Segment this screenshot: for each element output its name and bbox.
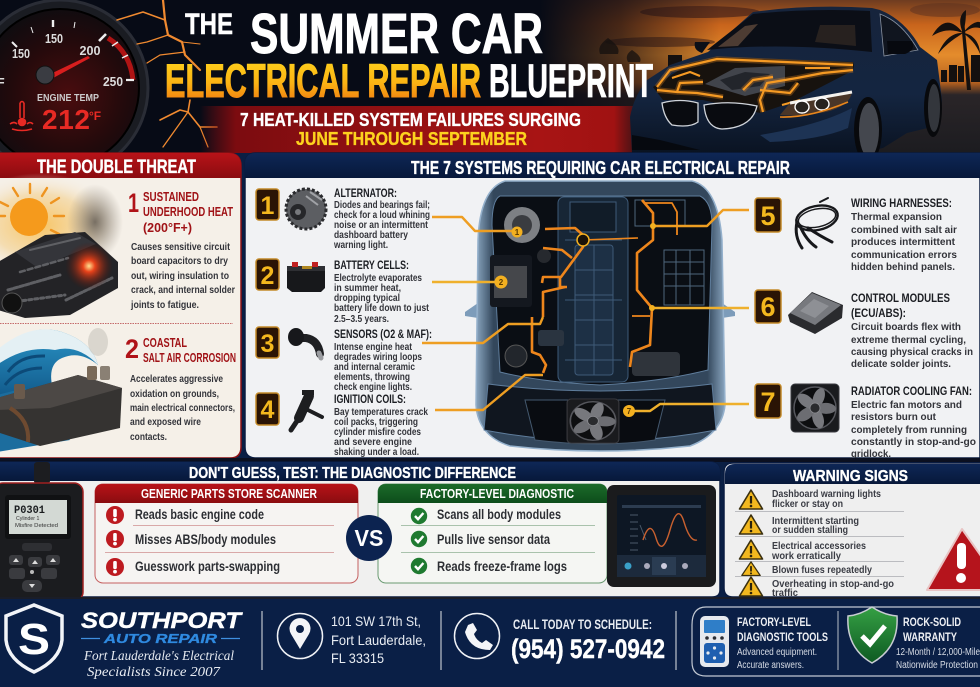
text: sensors: Intense engine heat: [334, 341, 412, 353]
icon: warranty shield: [848, 607, 897, 663]
title: SUMMER CAR: [250, 2, 543, 66]
header banner: [0, 0, 980, 176]
threat 1 text: Causes sensitive circuit: [131, 241, 230, 253]
text: battery cells: battery life down to just: [334, 302, 429, 314]
warning list text: Dashboard warning lights: [772, 488, 881, 500]
threat 1 text: crack, and internal solder: [131, 284, 235, 296]
card: factory-level diagnostic: FACTORY-LEVEL DIAGNOSTIC: [420, 486, 574, 501]
headlight: [780, 92, 852, 116]
heading: diagnostic difference: DON'T GUESS, TEST: THE DIAGNOSTIC DIFFERENCE: [189, 465, 516, 482]
text: battery cells: dropping typical: [334, 292, 400, 304]
panel: the double threat: [0, 153, 241, 458]
threat 2 text: COASTAL: [143, 335, 187, 350]
car x-ray diagram: [422, 181, 749, 451]
central engine block: [558, 197, 628, 382]
text: alternator: ALTERNATOR:: [334, 188, 397, 200]
brand name and tagline: Specialists Since 2007: [87, 664, 221, 679]
heading: warning signs: [725, 464, 980, 485]
text: ignition coils: [334, 394, 428, 458]
text: radiator cooling fan: completely from running: [851, 424, 967, 436]
leader lines: [422, 210, 749, 411]
card: factory-level diagnostic: Scans all body modules: [437, 507, 561, 522]
car x-ray diagram: 7: [627, 407, 632, 416]
text: radiator cooling fan: resistors burn out: [851, 411, 936, 423]
icon: wiring harness: [794, 198, 840, 248]
text: warranty: ROCK-SOLID: [903, 615, 961, 629]
text: warranty: WARRANTY: [903, 630, 957, 644]
text: wiring harnesses: produces intermittent: [851, 236, 955, 248]
card: generic parts store scanner: Misses ABS/body modules: [135, 532, 276, 547]
handheld OBD scanner: P0301: [14, 505, 45, 517]
warning list text: Blown fuses repeatedly: [772, 564, 872, 576]
hood wiring: [657, 59, 853, 112]
threat 1 text: out, wiring insulation to: [131, 270, 229, 282]
heading: the 7 systems: THE 7 SYSTEMS REQUIRING CAR ELECTRICAL REPAIR: [411, 158, 790, 178]
text: ignition coils: cylinder misfire codes: [334, 426, 421, 438]
text: wiring harnesses: [851, 198, 957, 273]
text: sensors: and internal ceramic: [334, 361, 415, 373]
sunset sky: [540, 0, 980, 153]
panel: the 7 systems: [245, 153, 980, 460]
text: ignition coils: IGNITION COILS:: [334, 394, 406, 406]
threat 1 text: [128, 188, 235, 311]
text: wiring harnesses: hidden behind panels.: [851, 261, 955, 273]
engine temperature gauge: 250: [103, 75, 123, 89]
threat 1 text: UNDERHOOD HEAT: [143, 204, 233, 219]
text: diagnostic tools: Advanced equipment.: [737, 647, 817, 658]
title: BLUEPRINT: [489, 54, 653, 107]
card: generic parts store scanner: Guesswork parts-swapping: [135, 559, 280, 574]
wheels: [854, 97, 882, 163]
box: tools and warranty: [692, 607, 980, 676]
engine temperature gauge: °F: [89, 109, 101, 123]
text: radiator cooling fan: [851, 386, 976, 460]
car x-ray diagram: 1: [515, 228, 520, 237]
battery block: [490, 255, 532, 307]
icon: location pin: [278, 614, 322, 658]
text: alternator: dashboard battery: [334, 229, 408, 241]
number badge 6: 6: [760, 292, 776, 322]
logo shield: S: [18, 615, 50, 664]
call to action: CALL TODAY TO SCHEDULE:: [513, 617, 652, 632]
number badge 4: [256, 393, 279, 425]
heading: the 7 systems: [245, 153, 980, 178]
text: alternator: check for a loud whining: [334, 209, 430, 221]
title: THE: [185, 8, 233, 41]
number badge 5: [755, 198, 781, 232]
card: factory-level diagnostic: Pulls live sensor data: [437, 532, 550, 547]
subtitle banner: [200, 106, 650, 153]
heading: the double threat: THE DOUBLE THREAT: [37, 157, 196, 178]
text: radiator cooling fan: constantly in stop-and-go: [851, 436, 976, 448]
threat 2 text: and exposed wire: [130, 416, 201, 428]
logo shield: [6, 605, 62, 672]
warning list text: Overheating in stop-and-go: [772, 578, 894, 590]
text: radiator cooling fan: Electric fan motors and: [851, 399, 962, 411]
threat 2 text: Accelerates aggressive: [130, 373, 223, 385]
warning list text: work erratically: [771, 550, 841, 562]
text: wiring harnesses: combined with salt air: [851, 224, 957, 236]
icon: diagnostic device: [700, 616, 729, 667]
brand name and tagline: [81, 608, 243, 679]
text: sensors: SENSORS (O2 & MAF):: [334, 329, 432, 341]
text: diagnostic tools: FACTORY-LEVEL: [737, 615, 811, 629]
number badge 1: [256, 189, 279, 220]
text: control modules: extreme thermal cycling,: [851, 334, 966, 346]
card: factory-level diagnostic: [378, 484, 607, 583]
text: diagnostic tools: DIAGNOSTIC TOOLS: [737, 630, 828, 644]
text: alternator: [333, 188, 430, 251]
text: sensors: [334, 329, 432, 393]
engine temperature gauge: 212: [42, 104, 90, 135]
palm trees and skyline: [599, 10, 980, 90]
card: generic parts store scanner: Reads basic engine code: [135, 507, 264, 522]
address: FL 33315: [331, 650, 384, 666]
brand name and tagline: Fort Lauderdale's Electrical: [83, 648, 234, 663]
hood wiring glow: [657, 59, 853, 112]
handheld OBD scanner: Cylinder 1: [16, 516, 39, 522]
warning list text: Intermittent starting: [772, 515, 859, 527]
wiring: [532, 200, 677, 373]
car with glowing engine wiring: [630, 7, 942, 163]
compressor and pump: [632, 352, 680, 376]
text: battery cells: Electrolyte evaporates: [334, 272, 422, 284]
text: sensors: elements, throwing: [334, 371, 410, 383]
text: diagnostic tools: [737, 615, 828, 671]
dark gutter under panels: [0, 458, 980, 462]
text: wiring harnesses: WIRING HARNESSES:: [851, 198, 952, 210]
car x-ray diagram: 2: [499, 278, 504, 287]
warning list icons: [740, 490, 762, 596]
handheld OBD scanner: Misfire Detected: [15, 523, 58, 529]
text: ignition coils: coil packs, triggering: [334, 416, 418, 428]
text: radiator cooling fan: gridlock.: [851, 448, 891, 460]
engine temperature gauge: [0, 0, 148, 176]
number badge 7: 7: [760, 387, 776, 417]
text: battery cells: 2.5–3.5 years.: [334, 313, 389, 325]
illustration: wave and corroded battery: [0, 328, 122, 452]
text: warranty: [896, 615, 980, 671]
engine temperature gauge: 150: [45, 32, 63, 46]
right side module: [635, 200, 704, 305]
grille: [662, 100, 757, 129]
text: control modules: delicate solder joints.: [851, 358, 951, 370]
text: control modules: Circuit boards flex with: [851, 321, 961, 333]
icon: radiator fan: [791, 384, 839, 432]
panel: diagnostic difference: [0, 462, 720, 601]
icon: control module: [788, 292, 843, 334]
text: control modules: (ECU/ABS):: [851, 308, 906, 320]
icon: sensor: [288, 328, 321, 358]
threat 2 text: oxidation on grounds,: [130, 388, 219, 400]
text: alternator: noise or an intermittent: [334, 219, 428, 231]
number badge 3: 3: [261, 330, 274, 358]
alternator node: [504, 207, 540, 243]
threat 1 text: (200°F+): [143, 220, 192, 235]
handheld OBD scanner: [0, 462, 83, 601]
number badge 6: [755, 290, 781, 323]
lightning bolts: [117, 0, 217, 147]
text: sensors: check engine lights.: [334, 381, 412, 393]
text: wiring harnesses: communication errors: [851, 249, 957, 261]
address: [331, 613, 426, 666]
text: alternator: warning light.: [333, 239, 388, 251]
text: battery cells: in summer heat,: [334, 282, 401, 294]
number badge 4: 4: [261, 396, 275, 424]
threat 1 text: board capacitors to dry: [131, 255, 228, 267]
call to action: (954) 527-0942: [511, 634, 665, 664]
heading: warning signs: WARNING SIGNS: [793, 468, 908, 485]
threat 2 text: SALT AIR CORROSION: [143, 350, 236, 365]
large red warning triangle: [927, 529, 980, 590]
text: battery cells: [334, 260, 429, 325]
panel: warning signs: [724, 463, 980, 599]
threat 2 text: contacts.: [130, 431, 167, 443]
card: generic parts store scanner: [95, 484, 358, 583]
icon: ignition coil: [291, 390, 322, 430]
brand name and tagline: AUTO REPAIR: [103, 632, 217, 646]
engine temperature gauge: ENGINE TEMP: [37, 92, 99, 104]
warning list text: [771, 488, 894, 599]
threat 1 text: 1: [128, 188, 139, 218]
radiator fan: [567, 399, 619, 443]
engine temperature gauge: 150: [12, 47, 30, 61]
number badge 3: [256, 327, 279, 358]
VS badge: VS: [354, 525, 384, 551]
text: alternator: Diodes and bearings fail;: [334, 199, 430, 211]
threat 1 text: joints to fatigue.: [130, 299, 199, 311]
text: wiring harnesses: Thermal expansion: [851, 211, 942, 223]
number badge 7: [755, 384, 781, 418]
number badge 1: 1: [261, 192, 275, 220]
number badge 5: 5: [760, 201, 776, 231]
text: ignition coils: shaking under a load.: [334, 446, 419, 458]
card: generic parts store scanner: GENERIC PARTS STORE SCANNER: [141, 486, 317, 501]
brand name and tagline: SOUTHPORT: [81, 608, 243, 633]
VS badge: [346, 515, 392, 561]
text: control modules: CONTROL MODULES: [851, 293, 950, 305]
icon: phone: [454, 614, 500, 658]
card: factory-level diagnostic: Reads freeze-frame logs: [437, 559, 567, 574]
address: 101 SW 17th St,: [331, 613, 421, 629]
engine temperature gauge: 200: [80, 44, 101, 58]
text: sensors: degrades wiring loops: [334, 351, 422, 363]
call to action: [511, 617, 665, 664]
text: diagnostic tools: Accurate answers.: [737, 660, 804, 671]
number badge 2: 2: [261, 262, 274, 290]
number badge 2: [256, 259, 279, 290]
text: control modules: [851, 293, 973, 370]
title: [165, 2, 653, 107]
icon: alternator: [286, 189, 326, 229]
text: ignition coils: Bay temperatures crack: [334, 406, 428, 418]
address: Fort Lauderdale,: [331, 632, 426, 648]
diagnostic tablet: [607, 485, 716, 587]
subtitle banner: JUNE THROUGH SEPTEMBER: [296, 129, 527, 149]
warning list text: flicker or stay on: [772, 498, 843, 510]
warning list text: or sudden stalling: [772, 524, 848, 536]
threat 1 text: SUSTAINED: [143, 189, 199, 204]
icon: battery: [287, 262, 325, 292]
threat 2 text: 2: [125, 334, 139, 364]
footer: [0, 597, 980, 687]
threat 2 text: main electrical connectors,: [130, 402, 235, 414]
text: ignition coils: and severe engine: [334, 436, 412, 448]
heading: diagnostic difference: [0, 462, 720, 482]
warning list text: Electrical accessories: [772, 540, 866, 552]
title: ELECTRICAL REPAIR: [165, 54, 481, 107]
hood engine bay: [653, 57, 854, 113]
threat 2 text: [125, 334, 236, 443]
subtitle banner: 7 HEAT-KILLED SYSTEM FAILURES SURGING: [240, 110, 581, 130]
text: battery cells: BATTERY CELLS:: [334, 260, 409, 272]
warning list text: traffic: [772, 587, 798, 599]
illustration: sun over overheating engine: [0, 173, 123, 318]
